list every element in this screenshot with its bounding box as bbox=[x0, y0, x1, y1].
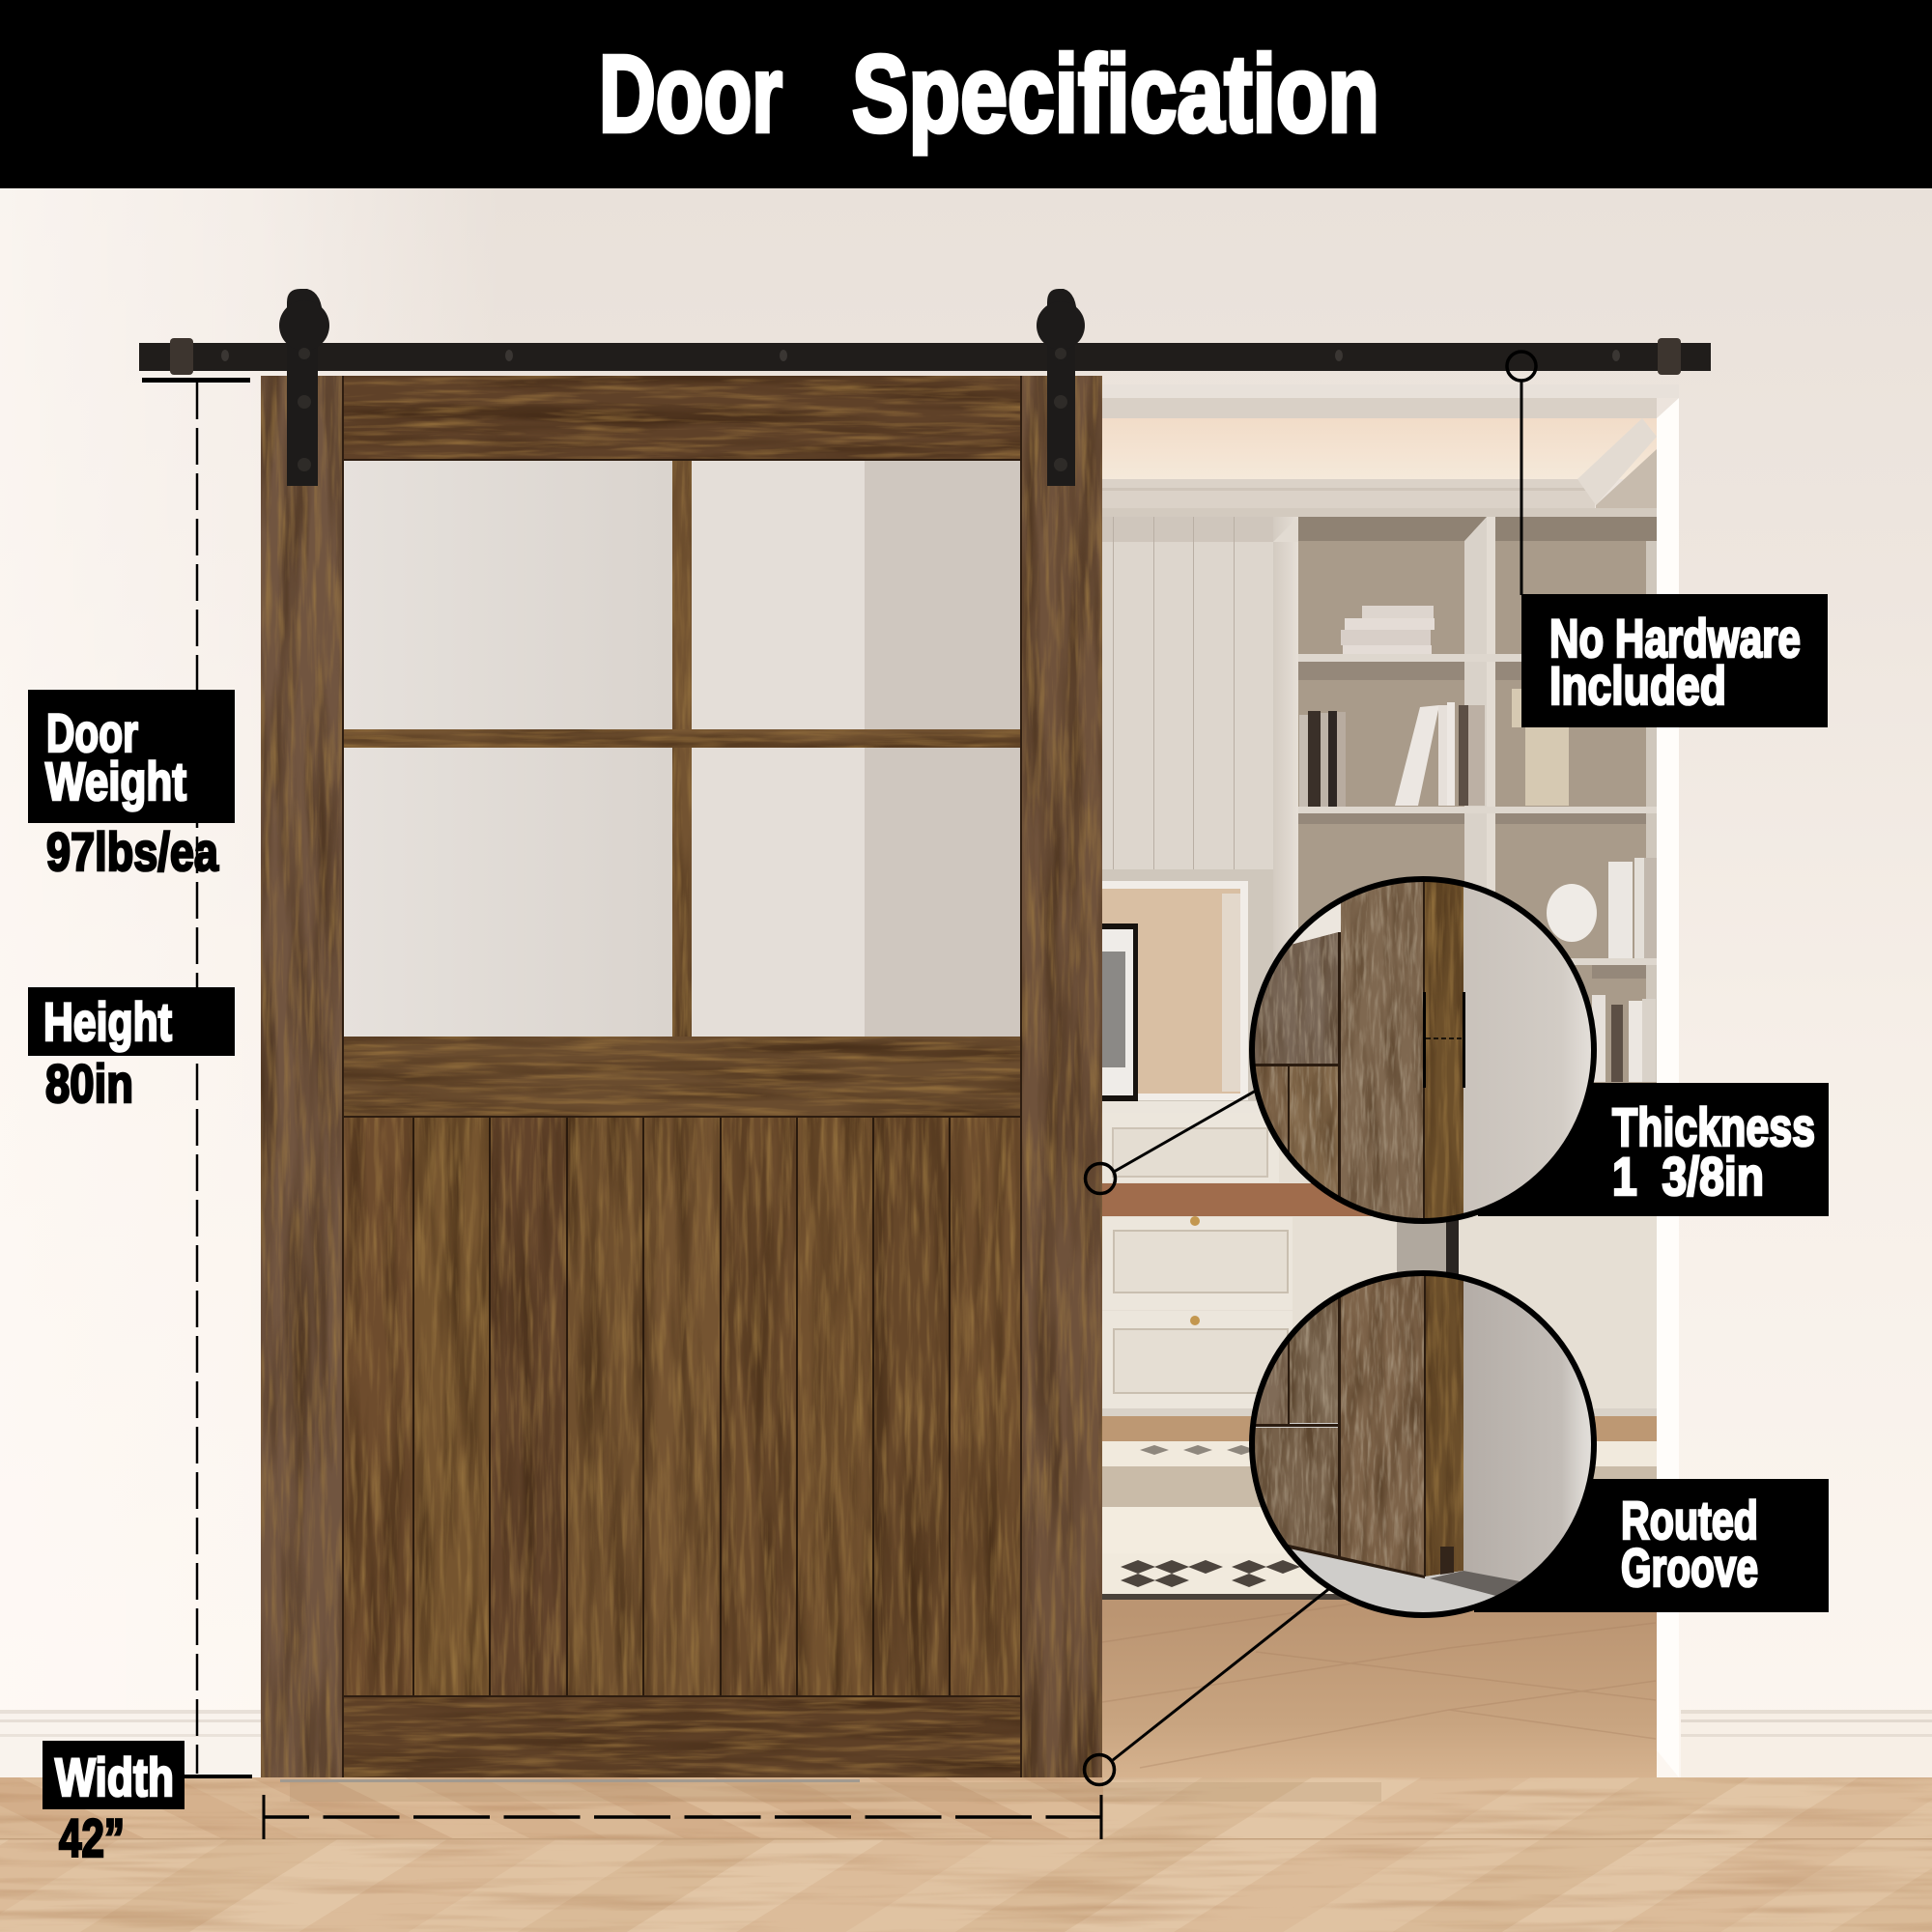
bookshelf bbox=[1273, 517, 1657, 1116]
height value: 80in bbox=[45, 1053, 133, 1114]
door planks bbox=[344, 1118, 1020, 1696]
zoom detail circle: door thickness bbox=[1246, 874, 1604, 1231]
hardware pointer bbox=[1507, 352, 1536, 595]
right hanger bbox=[1037, 289, 1085, 486]
title banner bbox=[0, 0, 1932, 188]
label box: routed groove bbox=[1474, 1479, 1829, 1612]
thickness pointer bbox=[1086, 1091, 1256, 1194]
label box: no hardware included: Included bbox=[1549, 655, 1726, 716]
label box: no hardware included: No Hardware bbox=[1549, 608, 1801, 668]
height dimension line bbox=[142, 378, 252, 1778]
zoom detail circle: routed groove bbox=[1246, 1267, 1604, 1621]
label box: door weight: Door bbox=[46, 702, 138, 763]
label box: height: Height bbox=[43, 991, 172, 1052]
framed art bbox=[1102, 881, 1248, 1101]
stiles bbox=[261, 376, 1102, 1777]
barn door bbox=[261, 376, 1102, 1777]
vertical muntin bbox=[672, 460, 692, 1037]
title: Specification bbox=[852, 33, 1379, 155]
soffit and ceiling bbox=[1102, 398, 1657, 517]
sliding track rail bbox=[139, 338, 1711, 375]
door weight value: 97lbs/ea bbox=[46, 821, 219, 882]
muntins bbox=[344, 729, 1020, 748]
wooden counter bbox=[1102, 1183, 1411, 1216]
paneled wall bbox=[1102, 517, 1298, 1106]
thickness dimension marks bbox=[1423, 992, 1465, 1088]
baseboards bbox=[0, 1710, 1932, 1777]
title bbox=[599, 33, 1379, 155]
label box: thickness bbox=[1478, 1083, 1829, 1216]
label box: door weight bbox=[28, 690, 235, 823]
plank groove gaps bbox=[412, 1118, 951, 1696]
label box: no hardware included bbox=[1521, 594, 1828, 727]
glass panes bbox=[344, 460, 1020, 1037]
label box: routed groove: Routed bbox=[1621, 1490, 1758, 1550]
label box: thickness: Thickness bbox=[1612, 1096, 1815, 1157]
floor in foreground bbox=[0, 1777, 1932, 1932]
title: Door bbox=[599, 33, 782, 155]
books and decor on shelves bbox=[1299, 606, 1657, 1082]
label box: routed groove: Groove bbox=[1621, 1537, 1758, 1598]
left hanger bbox=[279, 289, 329, 486]
room seen through the opening bbox=[1102, 398, 1657, 1777]
width value: 42” bbox=[59, 1807, 125, 1868]
cabinet and drawers bbox=[1102, 1101, 1657, 1420]
label box: width: Width bbox=[55, 1747, 174, 1807]
label box: thickness: 1 3/8in bbox=[1612, 1146, 1764, 1207]
groove pointer bbox=[1084, 1587, 1331, 1785]
rails bbox=[344, 376, 1020, 1777]
frame shadow lines bbox=[342, 376, 1022, 1777]
label box: door weight: Weight bbox=[45, 751, 186, 811]
opening right trim bbox=[1102, 384, 1679, 1777]
width dimension line bbox=[263, 1795, 1103, 1839]
room floor and rug bbox=[1102, 1416, 1657, 1777]
